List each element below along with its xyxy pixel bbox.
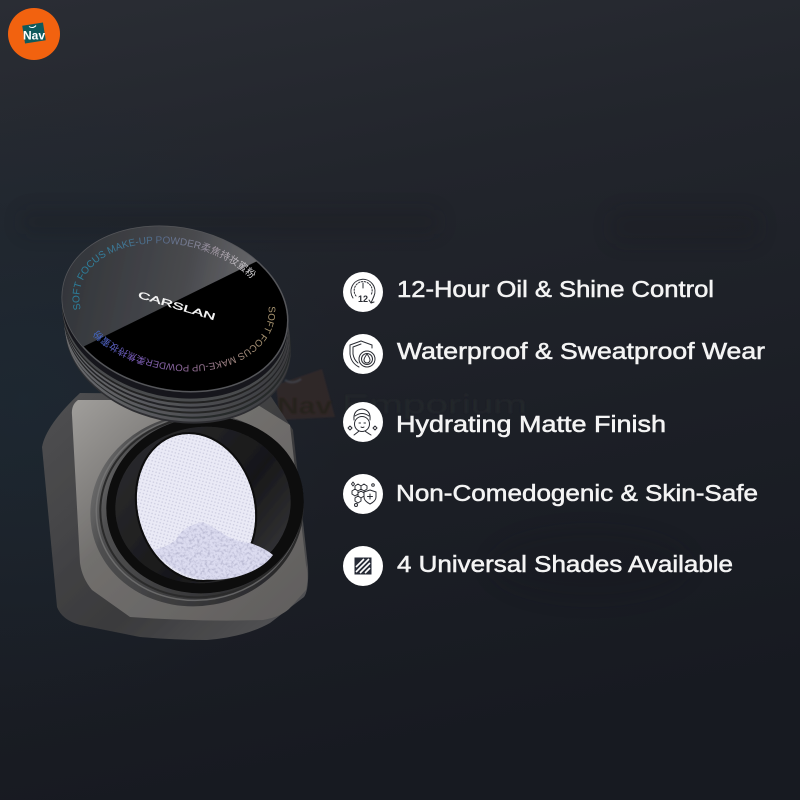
label: Hydrating Matte Finish xyxy=(396,411,666,437)
icon: gauge clock xyxy=(343,272,383,312)
feature: waterproof xyxy=(343,334,765,374)
label: Non-Comedogenic & Skin-Safe xyxy=(396,480,758,506)
black rim xyxy=(92,401,318,609)
loose powder xyxy=(153,522,273,580)
jar front face xyxy=(72,400,308,621)
inner wall xyxy=(103,413,303,597)
icon: hatched square xyxy=(343,546,383,586)
logo badge: Nav xyxy=(8,8,60,60)
watermark: Emporium xyxy=(342,389,527,419)
icon: gauge clock: 12 xyxy=(358,294,368,304)
icon: shield with drop xyxy=(343,334,383,374)
label: 12-Hour Oil & Shine Control xyxy=(397,276,714,302)
logo badge: Nav: Nav xyxy=(23,28,45,42)
feature: hydrating matte xyxy=(343,402,666,442)
watermark: Nav xyxy=(277,393,333,420)
product: lid xyxy=(62,226,291,424)
lid brand: CARSLAN: CARSLAN xyxy=(137,290,217,323)
watermark xyxy=(276,369,527,420)
label: 4 Universal Shades Available xyxy=(397,551,733,577)
threaded neck xyxy=(75,397,319,623)
sieve xyxy=(121,421,271,593)
feature: non-comedogenic xyxy=(343,474,758,514)
icon: face with towel xyxy=(343,402,383,442)
lid ribbed side xyxy=(46,211,307,444)
icon: cells with shield xyxy=(343,474,383,514)
jar outer shell xyxy=(42,393,308,640)
feature: universal shades xyxy=(343,546,733,586)
product: open powder jar xyxy=(42,393,319,640)
curved text bottom: SOFT FOCUS MAKE-UP POWDER柔焦持妆蜜粉 xyxy=(93,306,276,372)
lid top face xyxy=(62,226,288,392)
label: Waterproof & Sweatproof Wear xyxy=(397,338,765,364)
feature: 12-hour oil control xyxy=(343,272,714,312)
curved text top: SOFT FOCUS MAKE-UP POWDER柔焦持妆蜜粉 xyxy=(72,236,256,310)
